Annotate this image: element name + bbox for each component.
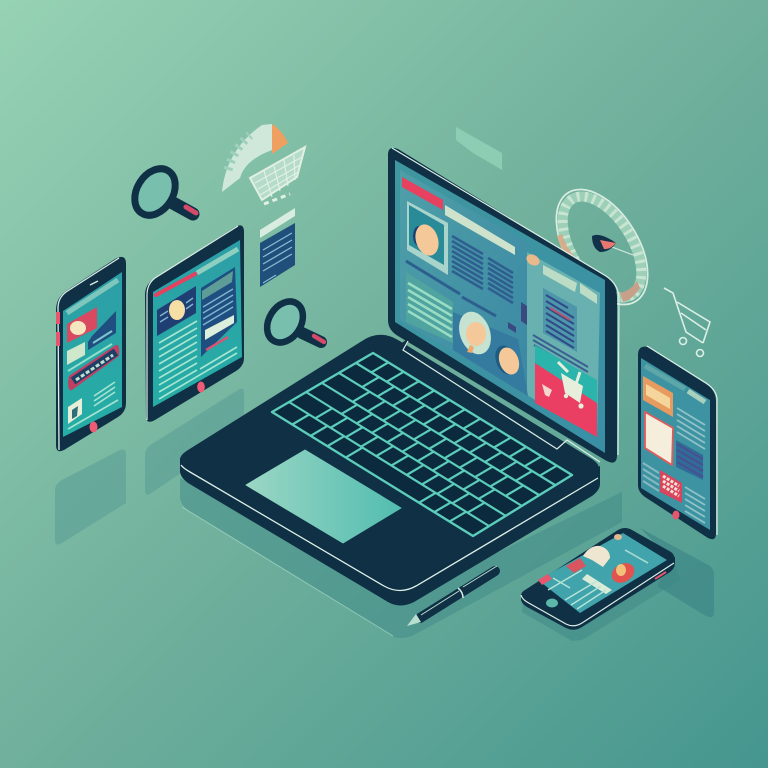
phone edge highlights	[58, 258, 119, 450]
cream card	[205, 315, 234, 340]
magnifier lower	[260, 295, 324, 349]
small dark tags	[508, 302, 527, 333]
red header	[402, 177, 443, 210]
gauge warm segment bottom	[620, 281, 640, 302]
shadow: laptop lower edge highlight	[182, 507, 393, 636]
header bar	[260, 208, 295, 238]
caption lines	[406, 261, 496, 316]
tablet edge highlights	[147, 226, 238, 420]
shopping cart icon right	[664, 288, 710, 356]
laptop screen display	[395, 160, 605, 453]
right column header	[524, 252, 597, 304]
article text column two	[488, 258, 513, 303]
hinge left	[398, 337, 411, 353]
laptop base thickness	[180, 458, 600, 606]
key rows	[289, 363, 555, 526]
shop banner	[535, 345, 597, 437]
phone home button	[546, 598, 558, 608]
phone body	[56, 257, 126, 451]
shadow: small phone below	[522, 565, 680, 641]
body text lines	[159, 321, 237, 399]
gauge needle	[592, 235, 633, 255]
red tag	[538, 574, 552, 585]
trackpad	[246, 450, 401, 543]
lower left lines	[643, 463, 659, 491]
code card	[660, 470, 682, 503]
top bar	[645, 366, 685, 389]
phone screen	[538, 533, 667, 613]
light address bar	[445, 205, 515, 255]
cream bar	[67, 342, 85, 365]
phone body	[522, 528, 674, 621]
laptop base top	[180, 335, 599, 588]
base edge highlight	[181, 465, 598, 590]
right column document	[543, 288, 577, 352]
lens	[260, 295, 310, 349]
cream band	[582, 574, 612, 594]
left phone	[56, 257, 126, 451]
red pill header	[156, 274, 195, 295]
dial icon	[222, 124, 288, 192]
lines	[94, 382, 115, 406]
phone screen	[641, 358, 710, 530]
shadow: tablet	[145, 389, 244, 495]
small phone	[521, 528, 675, 630]
phone speaker	[90, 281, 98, 285]
purple block	[676, 440, 703, 480]
green list block	[406, 272, 453, 343]
right phone	[638, 346, 717, 539]
phone edge highlight	[521, 563, 674, 626]
shadow: laptop	[180, 478, 622, 638]
red line	[206, 337, 228, 350]
shadow: small phone right	[640, 528, 714, 617]
shopping cart icon top	[250, 147, 305, 204]
lens	[126, 161, 184, 223]
blue media panel	[453, 307, 528, 396]
article text column one	[452, 236, 483, 289]
phone camera	[614, 534, 622, 540]
phone edge highlights	[647, 346, 717, 535]
red circle	[608, 559, 638, 587]
lines	[548, 570, 606, 609]
keyboard	[272, 353, 572, 536]
decorative bar top	[456, 127, 502, 170]
phone side button	[655, 572, 666, 579]
phone home button	[672, 510, 680, 520]
navy hero card	[157, 286, 196, 336]
tablet screen	[153, 240, 242, 407]
lines right	[677, 408, 705, 449]
magnifier top	[126, 161, 196, 223]
key dividers	[288, 362, 557, 525]
pen	[407, 566, 497, 626]
navy side column	[201, 267, 237, 357]
photo card	[407, 201, 448, 275]
laptop screen bezel	[388, 148, 617, 463]
blue document	[260, 223, 295, 287]
right column lines	[533, 335, 588, 377]
main content area	[400, 170, 528, 396]
gauge warm segment	[557, 234, 578, 268]
red pill	[68, 345, 119, 390]
gauge behind laptop screen	[538, 174, 666, 320]
phone side buttons	[56, 312, 60, 346]
lower right lines	[685, 487, 705, 523]
white card	[645, 412, 673, 465]
shadow: left phone	[55, 450, 126, 544]
gauge ring	[538, 174, 666, 320]
handle	[173, 203, 193, 214]
hinge and screen edge lines	[392, 148, 619, 462]
phone thickness	[521, 557, 675, 630]
tablet home button	[197, 382, 205, 392]
banner cart	[561, 373, 583, 403]
navy list card	[88, 311, 116, 350]
red photo card	[67, 307, 97, 343]
handle	[302, 333, 321, 342]
right column	[527, 252, 600, 437]
cream icon	[68, 398, 82, 424]
tablet body	[145, 225, 244, 422]
tablet	[145, 225, 244, 422]
phone home button	[90, 422, 98, 432]
cream blob	[583, 546, 610, 567]
phone body	[638, 347, 716, 539]
phone screen	[63, 272, 122, 437]
orange card	[643, 376, 673, 417]
laptop	[180, 148, 619, 606]
